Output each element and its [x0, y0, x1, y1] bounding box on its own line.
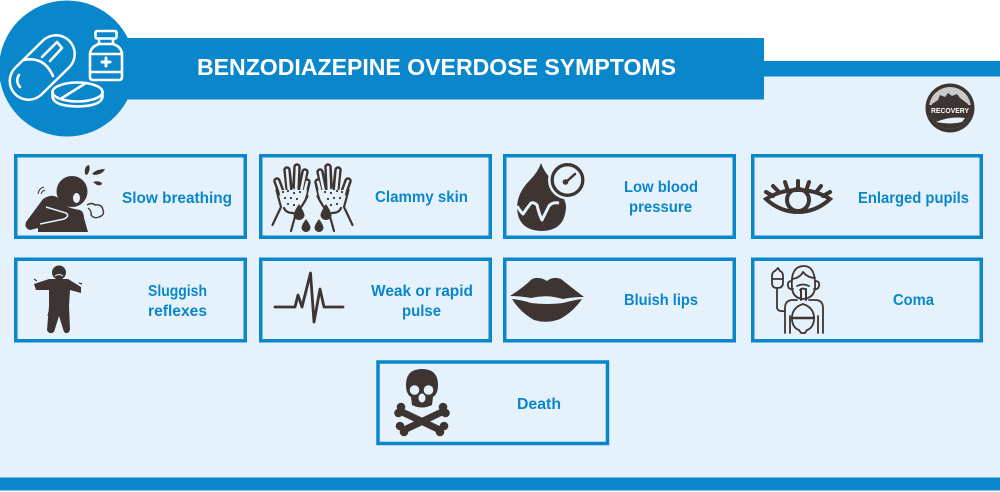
panel: death [378, 362, 608, 444]
icon: pulse line [275, 273, 343, 322]
panel: weak or rapid pulse [261, 259, 490, 341]
label: Death [517, 396, 561, 413]
label line 2: pulse [402, 303, 441, 320]
panel: sluggish reflexes [16, 259, 245, 341]
icon: eye [766, 181, 830, 212]
thin header band [760, 61, 1000, 76]
label: Slow breathing [122, 190, 232, 207]
panel: coma [753, 259, 981, 341]
panel: clammy skin [261, 156, 490, 237]
panel: slow breathing [16, 156, 245, 237]
panel: low blood pressure [505, 156, 734, 237]
label: Coma [893, 292, 934, 309]
label: Enlarged pupils [858, 190, 969, 207]
icon: lips [510, 278, 584, 322]
icon: skull and crossbones [394, 369, 450, 436]
label line 2: reflexes [148, 303, 207, 320]
icon: sluggish figure [34, 266, 82, 333]
icon: person short of breath [26, 165, 105, 232]
icon: blood drop and gauge [517, 160, 587, 231]
logo: recovery badge [926, 84, 974, 132]
title: BENZODIAZEPINE OVERDOSE SYMPTOMS [197, 54, 676, 80]
label: Sluggish [148, 283, 207, 300]
logo: recovery badge: RECOVERY [931, 108, 969, 115]
panel: bluish lips [505, 259, 734, 341]
title banner [100, 38, 764, 100]
label: Clammy skin [375, 189, 468, 206]
icon: patient on oxygen [772, 266, 823, 333]
icon: pills badge [0, 0, 135, 136]
bottom band [0, 478, 1000, 490]
label: Bluish lips [624, 292, 698, 309]
panel: enlarged pupils [753, 156, 981, 237]
icon: clammy hands [272, 167, 352, 232]
label line 2: pressure [629, 199, 692, 216]
label: Weak or rapid [371, 283, 473, 300]
label: Low blood [624, 179, 698, 196]
